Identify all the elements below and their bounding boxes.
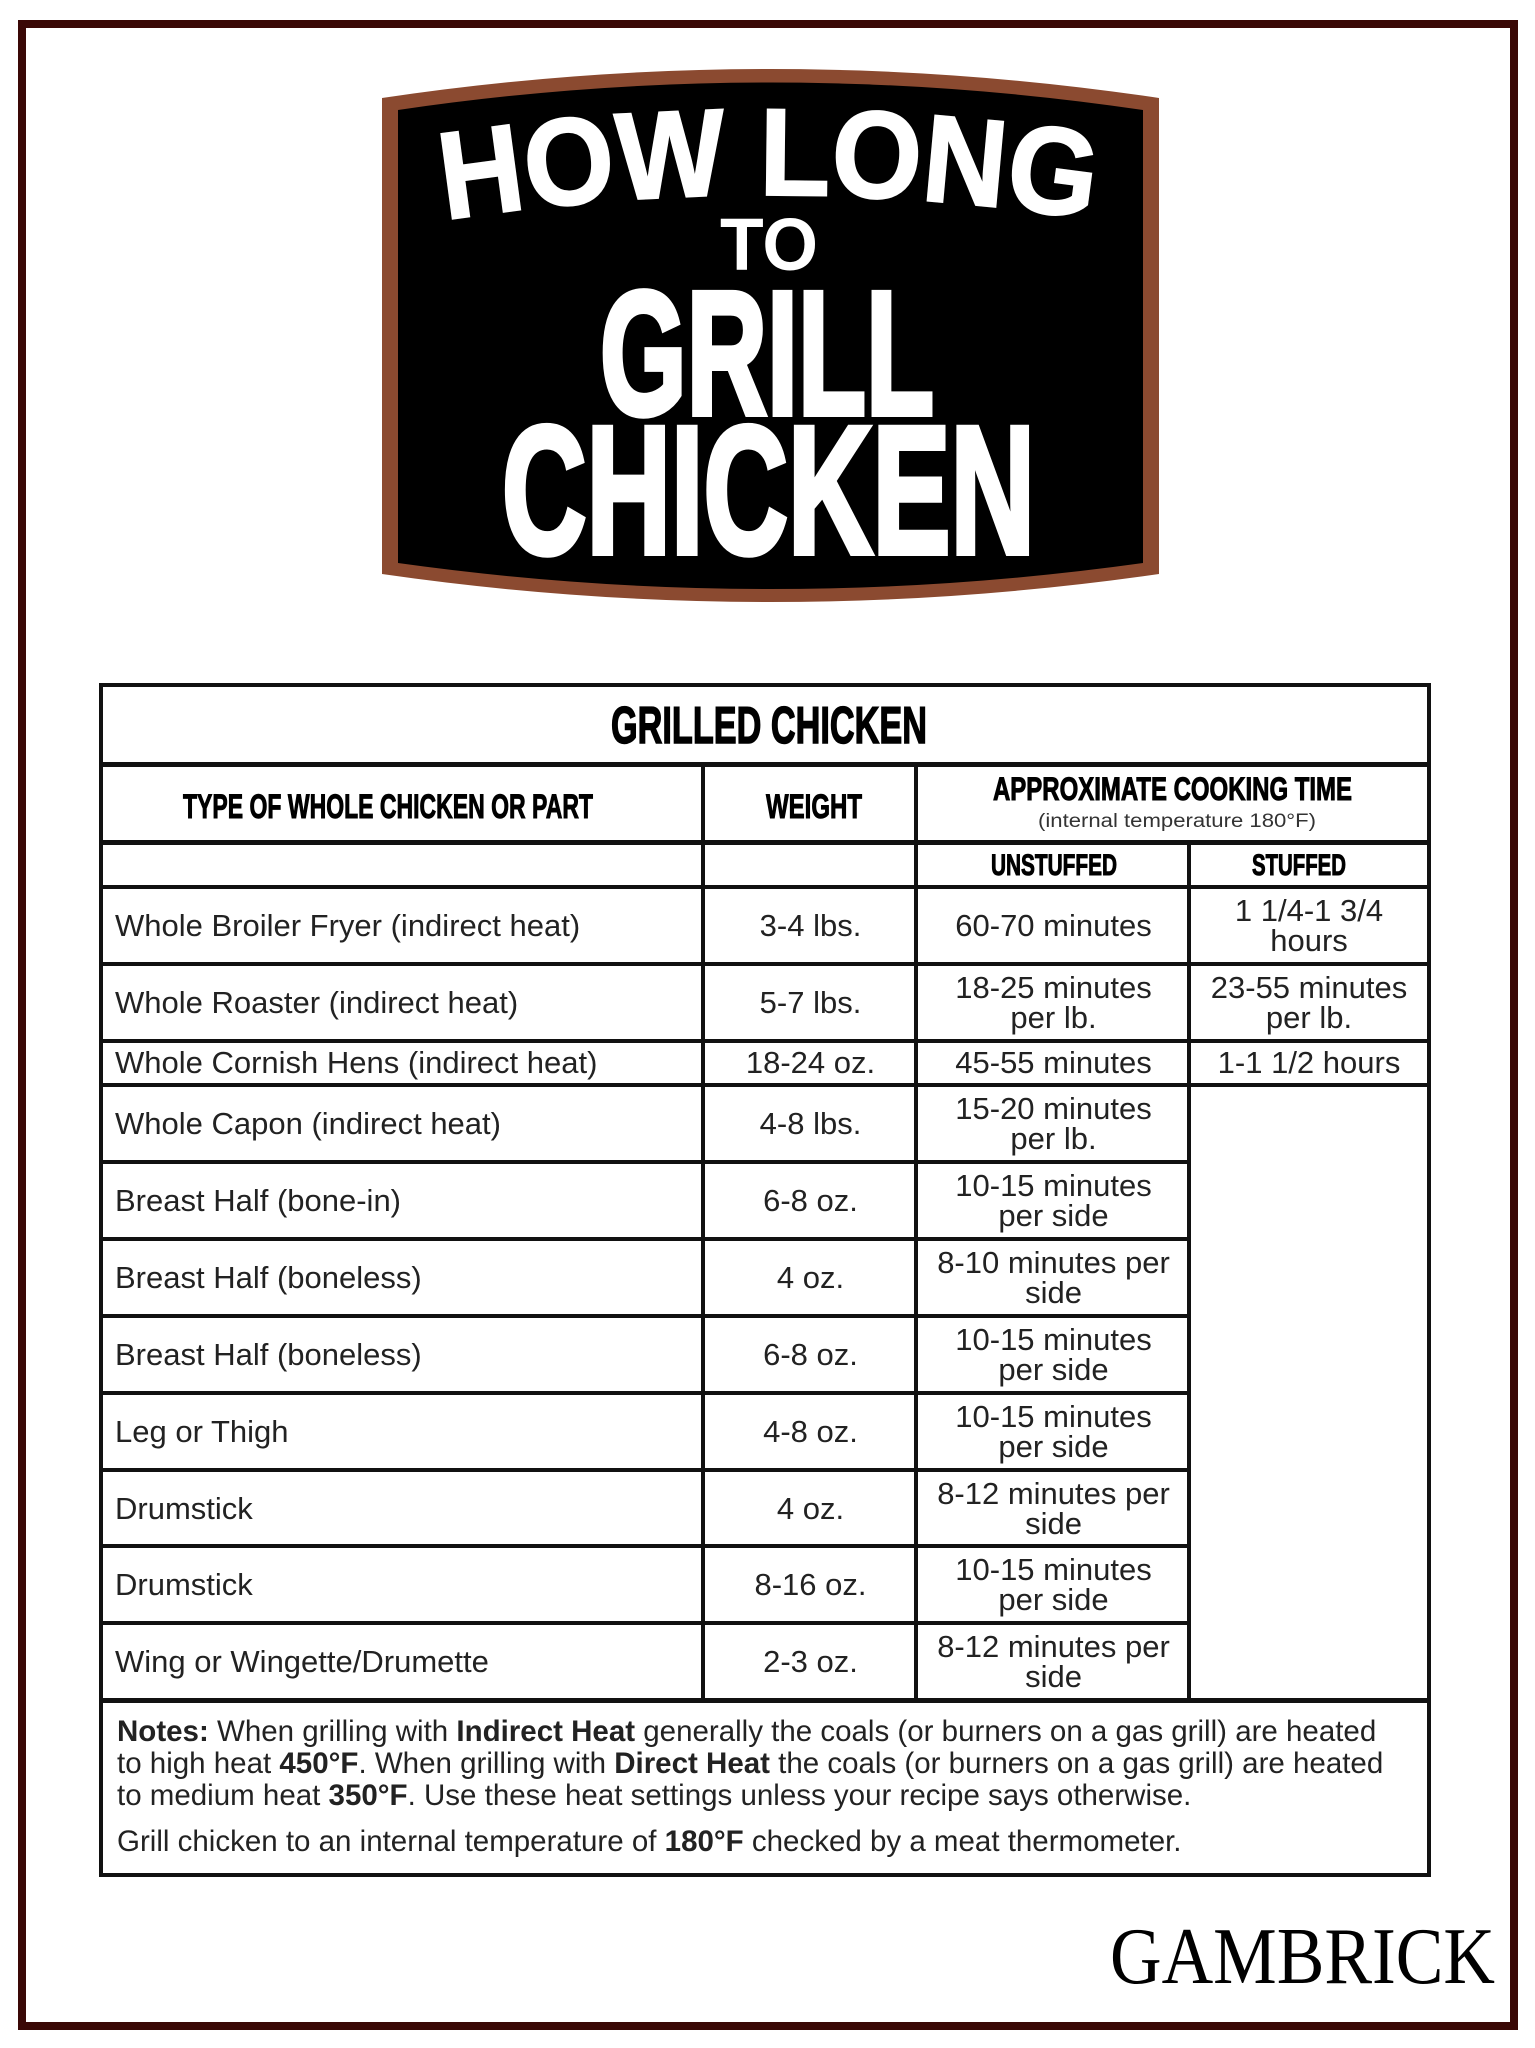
- title: TO: TO: [720, 203, 818, 286]
- row: drumstick 8-16 oz: Drumstick: [115, 1567, 253, 1602]
- row: leg or thigh: 10-15 minutes: [955, 1399, 1152, 1434]
- row: whole roaster: [115, 970, 1407, 1035]
- row: drumstick 8-16 oz: 8-16 oz.: [754, 1567, 866, 1602]
- table heading: WEIGHT: [766, 788, 862, 826]
- notes: to medium heat 350°F. Use these heat settings unless your recipe says otherwise.: [117, 1779, 1191, 1812]
- row: whole roaster: per lb.: [1266, 1000, 1352, 1035]
- row: drumstick 4 oz: 8-12 minutes per: [937, 1476, 1170, 1510]
- row: whole roaster: 23-55 minutes: [1211, 970, 1407, 1005]
- title banner: [382, 69, 1159, 602]
- row: wing: 2-3 oz.: [763, 1644, 858, 1679]
- row: whole broiler fryer: [115, 893, 1383, 958]
- row: drumstick 4 oz: Drumstick: [115, 1490, 253, 1526]
- title: GRILL: GRILL: [600, 256, 934, 452]
- row: drumstick 4 oz: side: [1025, 1506, 1082, 1540]
- row: breast half bone-in: Breast Half (bone-in): [115, 1183, 401, 1218]
- row: capon: 4-8 lbs.: [760, 1106, 861, 1141]
- row: breast half boneless 4 oz: 4 oz.: [777, 1260, 844, 1295]
- row: drumstick 8-16 oz: [115, 1552, 1152, 1617]
- row: cornish hens: 45-55 minutes: [955, 1045, 1152, 1080]
- row: breast half boneless 4 oz: [115, 1245, 1170, 1310]
- row: whole broiler fryer: 3-4 lbs.: [760, 908, 861, 943]
- title: HOW LONG: HOW LONG: [440, 108, 1094, 220]
- row: whole roaster: Whole Roaster (indirect heat): [115, 985, 518, 1020]
- row: whole roaster: 18-25 minutes: [955, 970, 1152, 1005]
- row: capon: Whole Capon (indirect heat): [115, 1106, 501, 1141]
- row: leg or thigh: [115, 1399, 1152, 1464]
- row: drumstick 8-16 oz: 10-15 minutes: [955, 1552, 1152, 1587]
- row: wing: [115, 1629, 1170, 1694]
- row: whole broiler fryer: hours: [1270, 923, 1348, 958]
- table heading: (internal temperature 180°F): [1038, 811, 1316, 832]
- row: capon: [115, 1091, 1152, 1156]
- row: whole roaster: per lb.: [1010, 1000, 1097, 1035]
- row: drumstick 4 oz: [115, 1476, 1170, 1540]
- row: whole broiler fryer: 1 1/4-1 3/4: [1235, 893, 1383, 928]
- row: leg or thigh: per side: [998, 1429, 1109, 1464]
- row: capon: per lb.: [1010, 1121, 1097, 1156]
- notes: Notes: When grilling with Indirect Heat generally the coals (or burners on a gas grill) are heated: [117, 1715, 1376, 1748]
- row: breast half boneless 6-8 oz: 10-15 minutes: [955, 1322, 1152, 1357]
- row: breast half boneless 6-8 oz: Breast Half (boneless): [115, 1337, 422, 1372]
- row: breast half boneless 6-8 oz: [115, 1322, 1152, 1387]
- row: cornish hens: 1-1 1/2 hours: [1218, 1045, 1400, 1080]
- row: whole broiler fryer: 60-70 minutes: [955, 908, 1152, 943]
- row: breast half boneless 4 oz: 8-10 minutes per: [937, 1245, 1170, 1280]
- row: whole roaster: 5-7 lbs.: [760, 985, 861, 1020]
- row: capon: 15-20 minutes: [955, 1091, 1152, 1126]
- row: wing: Wing or Wingette/Drumette: [115, 1644, 489, 1679]
- notes: to high heat 450°F. When grilling with Direct Heat the coals (or burners on a gas grill) are heated: [117, 1747, 1383, 1780]
- row: breast half bone-in: [115, 1168, 1152, 1233]
- table heading: TYPE OF WHOLE CHICKEN OR PART: [183, 788, 593, 826]
- row: cornish hens: Whole Cornish Hens (indirect heat): [115, 1045, 597, 1080]
- row: breast half boneless 4 oz: side: [1025, 1275, 1082, 1310]
- row: whole broiler fryer: Whole Broiler Fryer (indirect heat): [115, 908, 580, 943]
- table heading: GRILLED CHICKEN: [611, 697, 927, 755]
- row: breast half bone-in: per side: [998, 1198, 1109, 1233]
- row: breast half boneless 6-8 oz: 6-8 oz.: [763, 1337, 858, 1372]
- row: drumstick 8-16 oz: per side: [998, 1582, 1109, 1617]
- row: leg or thigh: 4-8 oz.: [763, 1414, 858, 1449]
- row: breast half boneless 6-8 oz: per side: [998, 1352, 1109, 1387]
- row: leg or thigh: Leg or Thigh: [115, 1414, 288, 1449]
- table heading: APPROXIMATE COOKING TIME: [993, 771, 1352, 807]
- row: breast half bone-in: 10-15 minutes: [955, 1168, 1152, 1203]
- table heading: [182, 697, 1352, 880]
- row: cornish hens: 18-24 oz.: [746, 1045, 875, 1080]
- row: drumstick 4 oz: 4 oz.: [777, 1490, 844, 1526]
- row: cornish hens: [115, 1045, 1400, 1080]
- row: wing: side: [1025, 1659, 1082, 1694]
- row: wing: 8-12 minutes per: [937, 1629, 1170, 1664]
- notes: Grill chicken to an internal temperature of 180°F checked by a meat thermometer.: [117, 1825, 1182, 1858]
- title: CHICKEN: CHICKEN: [502, 388, 1035, 592]
- row: breast half bone-in: 6-8 oz.: [763, 1183, 858, 1218]
- notes: [117, 1715, 1383, 1858]
- row: breast half boneless 4 oz: Breast Half (boneless): [115, 1260, 422, 1295]
